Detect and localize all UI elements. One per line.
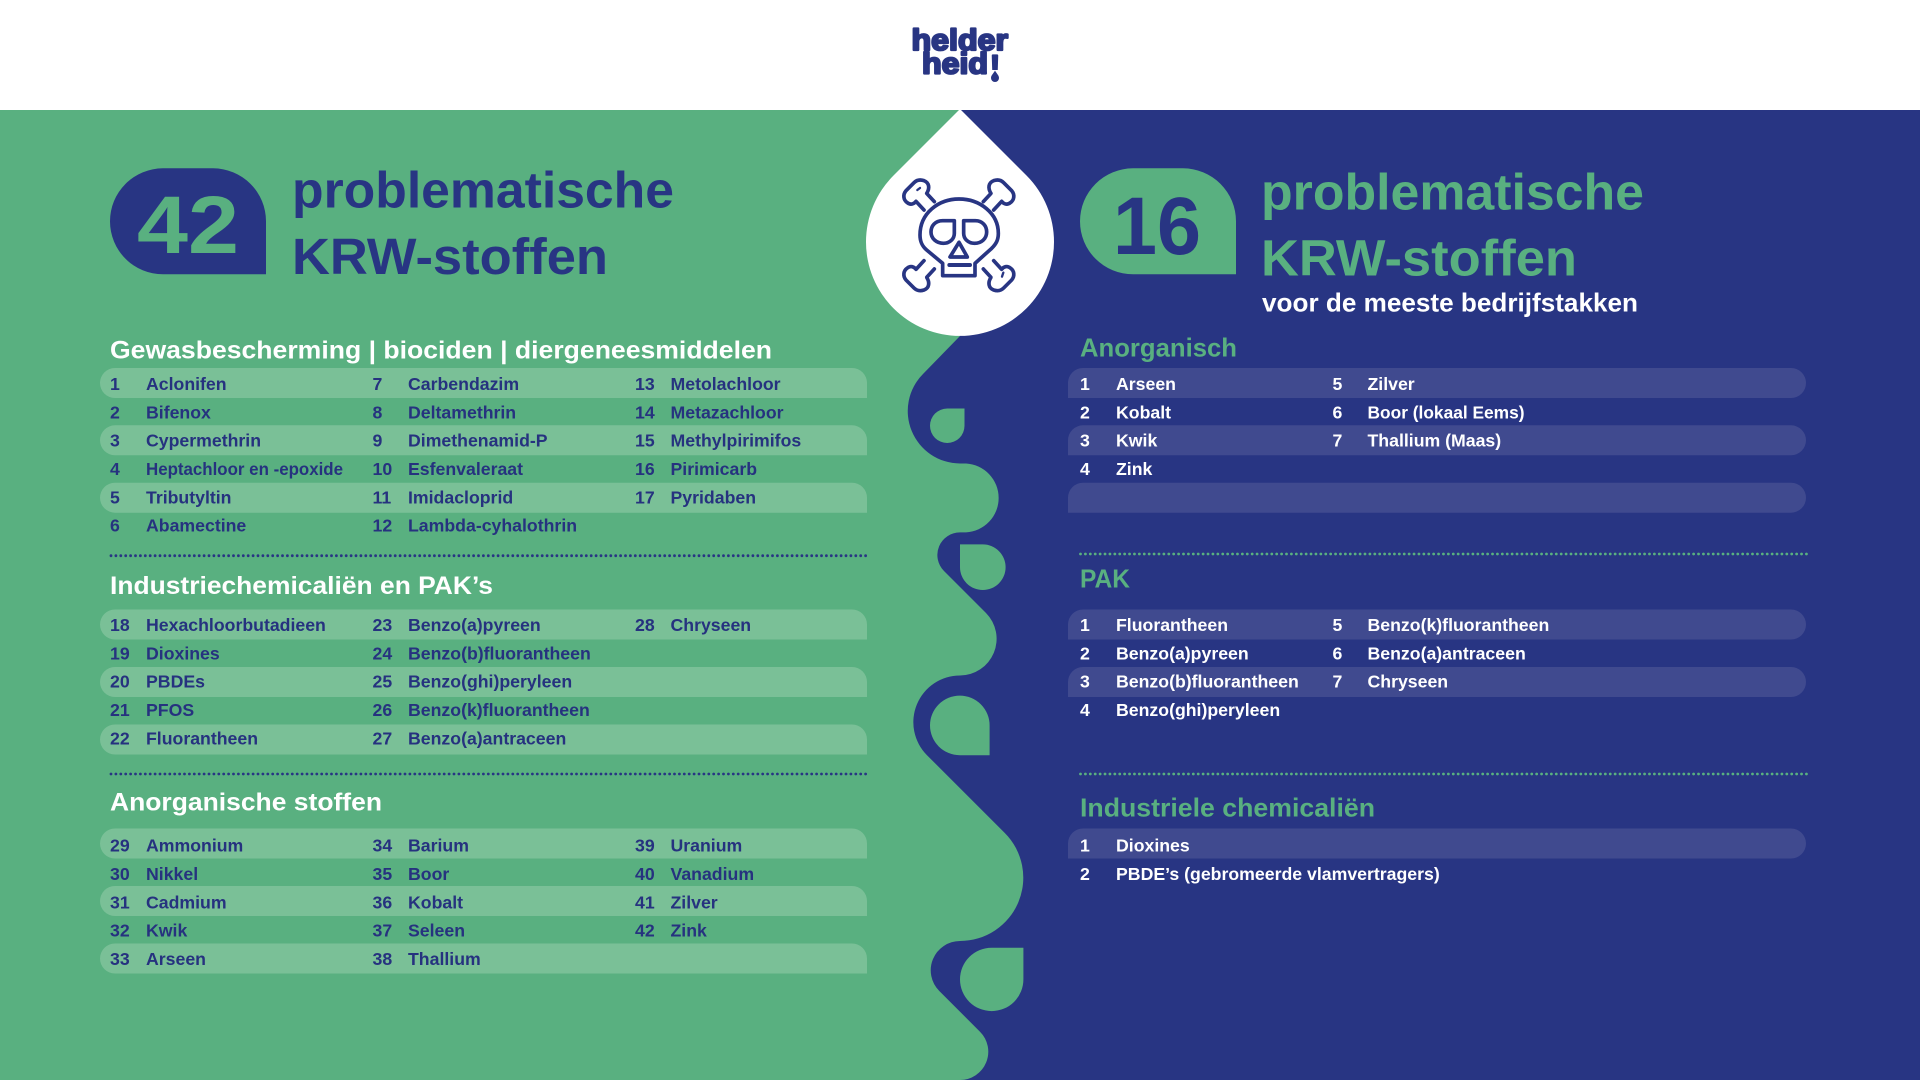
- list: industriele chemicalien: 2: [1080, 864, 1090, 884]
- list: anorganisch: Kobalt: [1116, 402, 1171, 422]
- list: anorganisch: Zilver: [1368, 374, 1415, 394]
- list: PAK: [1068, 610, 1806, 720]
- list: anorganisch: Arseen: [1116, 374, 1176, 394]
- list: gewasbescherming: 13: [635, 374, 655, 394]
- list: anorganisch: Zink: [1116, 459, 1153, 479]
- heading: PAK: PAK: [1080, 564, 1130, 594]
- list: anorganische stoffen: Kwik: [146, 921, 187, 941]
- heading: Anorganische stoffen: Anorganische stoffen: [110, 789, 382, 817]
- panel: right 16 stoffen: [1068, 163, 1806, 884]
- list: gewasbescherming: 7: [372, 374, 382, 394]
- list: anorganische stoffen: 35: [372, 864, 392, 884]
- list: PAK: Benzo(ghi)peryleen: [1116, 700, 1280, 720]
- wave droplets: [930, 408, 1023, 1011]
- heading: Industriele chemicalien: Industriele chemicaliën: [1080, 793, 1375, 823]
- list: gewasbescherming: Pirimicarb: [670, 459, 757, 479]
- list: PAK: Benzo(a)antraceen: [1368, 643, 1526, 663]
- list: PAK: Benzo(b)fluorantheen: [1116, 672, 1299, 692]
- panel: left 42 stoffen: [100, 161, 867, 974]
- list: anorganische stoffen: Barium: [408, 836, 469, 856]
- logo: helder heid!: helder: [912, 24, 1008, 57]
- list: anorganisch: 5: [1332, 374, 1342, 394]
- list: anorganisch: Thallium (Maas): [1368, 431, 1501, 451]
- list: industriechemicalien: 22: [110, 728, 130, 748]
- list: anorganisch: Kwik: [1116, 431, 1157, 451]
- list: anorganische stoffen: 41: [635, 892, 655, 912]
- list: industriechemicalien: 24: [372, 643, 392, 663]
- list: anorganische stoffen: 39: [635, 836, 655, 856]
- list: industriele chemicalien: PBDE’s (gebromeerde vlamvertragers): [1116, 864, 1440, 884]
- logo: helder heid!: heid: [922, 48, 988, 80]
- list: gewasbescherming: 1: [110, 374, 120, 394]
- list: gewasbescherming: Heptachloor en -epoxide: [146, 459, 343, 479]
- list: industriele chemicalien: 1: [1080, 836, 1090, 856]
- list: gewasbescherming: [100, 368, 867, 536]
- list: PAK: 6: [1332, 643, 1342, 663]
- list: industriechemicalien: 28: [635, 615, 655, 635]
- list: industriechemicalien: Hexachloorbutadieen: [146, 615, 326, 635]
- list: industriechemicalien: 20: [110, 672, 130, 692]
- list: PAK: 2: [1080, 643, 1090, 663]
- list: anorganische stoffen: 40: [635, 864, 655, 884]
- subtitle: voor de meeste bedrijfstakken: [1262, 288, 1638, 318]
- logo: helder heid!: !: [990, 50, 1000, 83]
- title: right: KRW-stoffen: [1261, 229, 1577, 286]
- list: industriele chemicalien: Dioxines: [1116, 836, 1190, 856]
- list: anorganische stoffen: 29: [110, 836, 130, 856]
- list: anorganische stoffen: Kobalt: [408, 892, 463, 912]
- list: anorganische stoffen: Zilver: [670, 892, 718, 912]
- list: industriechemicalien: 23: [372, 615, 392, 635]
- list: industriechemicalien: Chryseen: [670, 615, 751, 635]
- list: PAK: Fluorantheen: [1116, 615, 1228, 635]
- list: gewasbescherming: Cypermethrin: [146, 431, 261, 451]
- title: left: KRW-stoffen: [292, 228, 608, 285]
- list: industriechemicalien: 25: [372, 672, 392, 692]
- list: industriechemicalien: PFOS: [146, 700, 194, 720]
- list: anorganische stoffen: Seleen: [408, 921, 465, 941]
- icon: skull and crossbones: [904, 180, 1014, 291]
- list: anorganische stoffen: 36: [372, 892, 392, 912]
- list: anorganische stoffen: 32: [110, 921, 130, 941]
- list: gewasbescherming: Pyridaben: [670, 487, 756, 507]
- list: PAK: Chryseen: [1368, 672, 1448, 692]
- list: gewasbescherming: 16: [635, 459, 655, 479]
- list: gewasbescherming: Metazachloor: [670, 402, 784, 422]
- badge: 42: 42: [137, 180, 239, 271]
- list: PAK: 3: [1080, 672, 1090, 692]
- list: industriechemicalien: Benzo(a)antraceen: [408, 728, 566, 748]
- list: anorganisch: 6: [1332, 402, 1342, 422]
- list: gewasbescherming: Metolachloor: [670, 374, 781, 394]
- title: left: [292, 161, 674, 285]
- list: industriechemicalien: 26: [372, 700, 392, 720]
- list: gewasbescherming: Dimethenamid-P: [408, 431, 548, 451]
- list: anorganische stoffen: Ammonium: [146, 836, 243, 856]
- list: gewasbescherming: 10: [372, 459, 392, 479]
- list: PAK: 4: [1080, 700, 1090, 720]
- list: gewasbescherming: 6: [110, 516, 120, 536]
- badge: 42: [110, 168, 266, 274]
- list: anorganische stoffen: Vanadium: [670, 864, 754, 884]
- list: industriechemicalien: Benzo(k)fluorantheen: [408, 700, 590, 720]
- list: anorganische stoffen: Uranium: [670, 836, 742, 856]
- list: gewasbescherming: 11: [372, 487, 391, 507]
- list: PAK: Benzo(a)pyreen: [1116, 643, 1249, 663]
- list: gewasbescherming: 5: [110, 487, 120, 507]
- list: gewasbescherming: Bifenox: [146, 402, 211, 422]
- list: anorganische stoffen: Thallium: [408, 949, 481, 969]
- list: anorganisch: 4: [1080, 459, 1090, 479]
- list: anorganische stoffen: 37: [372, 921, 392, 941]
- list: industriechemicalien: 21: [110, 700, 130, 720]
- list: industriechemicalien: 27: [372, 728, 392, 748]
- list: gewasbescherming: Deltamethrin: [408, 402, 516, 422]
- list: PAK: 7: [1332, 672, 1342, 692]
- badge: 16: [1080, 168, 1236, 274]
- list: anorganische stoffen: 42: [635, 921, 655, 941]
- list: PAK: 1: [1080, 615, 1090, 635]
- title: left: problematische: [292, 161, 674, 218]
- list: anorganische stoffen: 34: [372, 836, 392, 856]
- list: anorganische stoffen: 30: [110, 864, 130, 884]
- list: anorganische stoffen: 31: [110, 892, 130, 912]
- logo: helder heid!: [912, 24, 1008, 83]
- list: anorganisch: [1068, 368, 1806, 513]
- list: anorganisch: 7: [1332, 431, 1342, 451]
- list: anorganisch: Boor (lokaal Eems): [1368, 402, 1525, 422]
- list: anorganische stoffen: Zink: [670, 921, 707, 941]
- list: gewasbescherming: Tributyltin: [146, 487, 231, 507]
- list: gewasbescherming: 12: [372, 516, 392, 536]
- list: anorganische stoffen: 38: [372, 949, 392, 969]
- title: right: [1261, 163, 1644, 286]
- list: gewasbescherming: Abamectine: [146, 516, 246, 536]
- list: industriechemicalien: Dioxines: [146, 643, 220, 663]
- list: PAK: Benzo(k)fluorantheen: [1368, 615, 1549, 635]
- list: anorganische stoffen: 33: [110, 949, 130, 969]
- list: PAK: 5: [1332, 615, 1342, 635]
- list: industriechemicalien: Benzo(ghi)peryleen: [408, 672, 572, 692]
- list: gewasbescherming: 15: [635, 431, 655, 451]
- list: gewasbescherming: Lambda-cyhalothrin: [408, 516, 577, 536]
- list: gewasbescherming: 3: [110, 431, 120, 451]
- list: industriechemicalien: 18: [110, 615, 130, 635]
- list: gewasbescherming: Imidacloprid: [408, 487, 513, 507]
- list: industriechemicalien: Fluorantheen: [146, 728, 258, 748]
- heading: Industriechemicalien: Industriechemicaliën en PAK’s: [110, 572, 493, 600]
- list: anorganisch: 2: [1080, 402, 1090, 422]
- green wave background panel: [0, 110, 1023, 1080]
- list: gewasbescherming: Esfenvaleraat: [408, 459, 523, 479]
- list: gewasbescherming: Methylpirimifos: [670, 431, 801, 451]
- badge: 16: 16: [1113, 181, 1201, 272]
- list: gewasbescherming: 9: [372, 431, 382, 451]
- list: gewasbescherming: Aclonifen: [146, 374, 227, 394]
- list: anorganisch: 1: [1080, 374, 1090, 394]
- list: gewasbescherming: 8: [372, 402, 382, 422]
- list: anorganische stoffen: [100, 828, 867, 974]
- list: industriechemicalien: Benzo(b)fluorantheen: [408, 643, 591, 663]
- list: gewasbescherming: Carbendazim: [408, 374, 519, 394]
- list: gewasbescherming: 17: [635, 487, 655, 507]
- white drop with skull icon: [866, 109, 1054, 336]
- list: industriechemicalien: Benzo(a)pyreen: [408, 615, 541, 635]
- list: anorganische stoffen: Cadmium: [146, 892, 227, 912]
- list: industriele chemicalien: [1068, 828, 1806, 884]
- heading: Gewasbescherming: Gewasbescherming | biociden | diergeneesmiddelen: [110, 336, 772, 364]
- list: anorganische stoffen: Arseen: [146, 949, 206, 969]
- list: anorganische stoffen: Boor: [408, 864, 449, 884]
- list: anorganisch: 3: [1080, 431, 1090, 451]
- list: gewasbescherming: 2: [110, 402, 120, 422]
- list: gewasbescherming: 14: [635, 402, 655, 422]
- list: anorganische stoffen: Nikkel: [146, 864, 198, 884]
- list: gewasbescherming: 4: [110, 459, 120, 479]
- list: industriechemicalien: [100, 610, 867, 754]
- list: industriechemicalien: 19: [110, 643, 130, 663]
- list: industriechemicalien: PBDEs: [146, 672, 205, 692]
- title: right: problematische: [1261, 163, 1644, 220]
- heading: Anorganisch: Anorganisch: [1080, 333, 1237, 363]
